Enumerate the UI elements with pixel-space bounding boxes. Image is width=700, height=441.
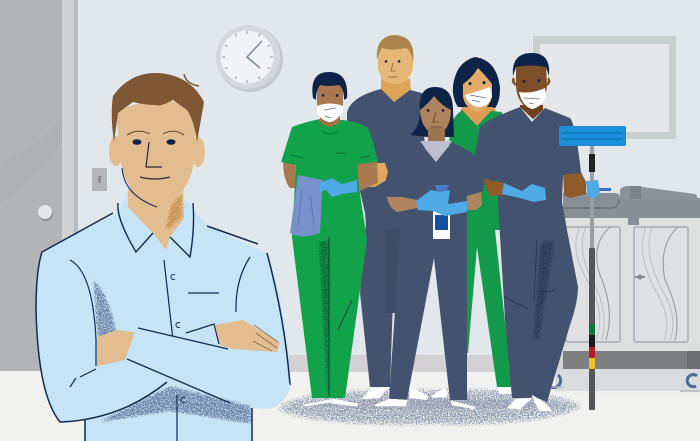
cart wheels — [544, 375, 700, 391]
face — [317, 82, 343, 122]
neck — [460, 107, 498, 128]
shirt outline — [36, 213, 290, 441]
hair — [112, 73, 204, 142]
eyes — [132, 139, 176, 145]
shirt stipple shading — [90, 275, 252, 425]
eyes — [385, 60, 400, 63]
mop head lines — [562, 133, 622, 139]
face — [516, 63, 547, 110]
nose and mouth — [388, 63, 398, 77]
door — [0, 0, 78, 371]
neck — [320, 114, 340, 126]
shoes — [507, 395, 552, 411]
arm right — [563, 172, 586, 198]
arm left — [283, 160, 296, 188]
eyes — [523, 79, 541, 83]
arm left — [387, 197, 418, 212]
brows — [127, 131, 184, 135]
green scrub top and trousers — [445, 110, 512, 387]
eyes — [427, 109, 444, 112]
neck — [520, 105, 543, 119]
shoes — [303, 399, 358, 406]
forearm sleeve — [127, 328, 290, 409]
face — [116, 101, 197, 207]
mop pole — [590, 146, 594, 250]
arm left — [483, 179, 504, 196]
face — [463, 68, 492, 112]
neck — [428, 128, 445, 150]
collar outline — [118, 203, 194, 257]
hand left — [97, 330, 135, 366]
green scrub top and trousers — [281, 119, 378, 398]
nose and mouth — [430, 112, 442, 127]
hair — [377, 35, 413, 62]
hair — [410, 87, 454, 137]
person: right green scrubs woman — [431, 57, 512, 398]
shirt — [36, 190, 291, 441]
shoes — [375, 399, 475, 409]
neck — [381, 78, 411, 102]
hand right — [215, 320, 280, 352]
trouser shading — [532, 240, 556, 340]
colour bands — [589, 324, 595, 369]
mask folds — [524, 98, 540, 104]
towel — [290, 175, 323, 236]
ears — [513, 78, 549, 85]
mask folds — [470, 95, 486, 102]
glove on pole — [586, 180, 600, 199]
ears — [109, 136, 205, 167]
face — [378, 48, 413, 86]
trouser shading — [318, 240, 330, 395]
grip — [589, 154, 595, 172]
forearm lines — [127, 328, 230, 403]
mop head — [559, 126, 626, 146]
man in foreground — [36, 73, 291, 441]
jaw line — [122, 168, 157, 207]
mask — [465, 87, 492, 107]
cleaning cart — [563, 186, 700, 369]
scrub top — [347, 89, 425, 240]
person: right man with mop — [470, 53, 586, 411]
shadow under feet — [270, 387, 590, 427]
shoes — [361, 386, 428, 400]
mask — [519, 88, 546, 109]
neck — [128, 180, 184, 250]
trouser lines — [504, 240, 555, 309]
top details — [290, 131, 370, 158]
mask — [317, 104, 343, 122]
mask folds — [324, 108, 336, 118]
person: middle woman holding spray bottle — [375, 87, 484, 409]
hair tuft — [184, 74, 199, 86]
towel folds — [298, 190, 314, 225]
scrub top and trousers — [470, 107, 581, 402]
bare arm — [357, 163, 390, 187]
arm right — [466, 192, 482, 210]
trousers — [360, 212, 402, 387]
trousers — [389, 235, 467, 400]
gloves — [416, 190, 467, 216]
fingers — [253, 325, 278, 351]
wall picture frame — [533, 36, 676, 139]
buttons — [171, 274, 185, 402]
face — [420, 96, 451, 136]
trouser lines — [329, 237, 352, 397]
scrub top — [385, 142, 484, 237]
floor — [0, 355, 700, 441]
hair — [312, 72, 347, 100]
wall clock — [216, 25, 283, 92]
hair — [513, 53, 549, 76]
mop — [559, 126, 626, 410]
undershirt — [420, 141, 452, 162]
shirt folds, placket and pocket — [70, 257, 270, 441]
hair — [453, 57, 500, 108]
nose and mouth — [140, 142, 170, 179]
eyes — [322, 94, 338, 97]
arm right — [357, 160, 378, 192]
gloves — [320, 178, 357, 197]
rear leg — [385, 230, 410, 313]
glove left — [502, 183, 546, 202]
light switch — [92, 168, 107, 191]
lower pole — [589, 248, 595, 410]
spray bottle — [433, 185, 450, 239]
floor dotted band by cart — [555, 369, 700, 393]
person: left green scrubs woman — [281, 72, 378, 406]
eyes — [468, 81, 486, 85]
neck shading — [163, 190, 183, 235]
person: tall man in navy scrubs — [347, 35, 428, 400]
shoes — [431, 388, 512, 398]
